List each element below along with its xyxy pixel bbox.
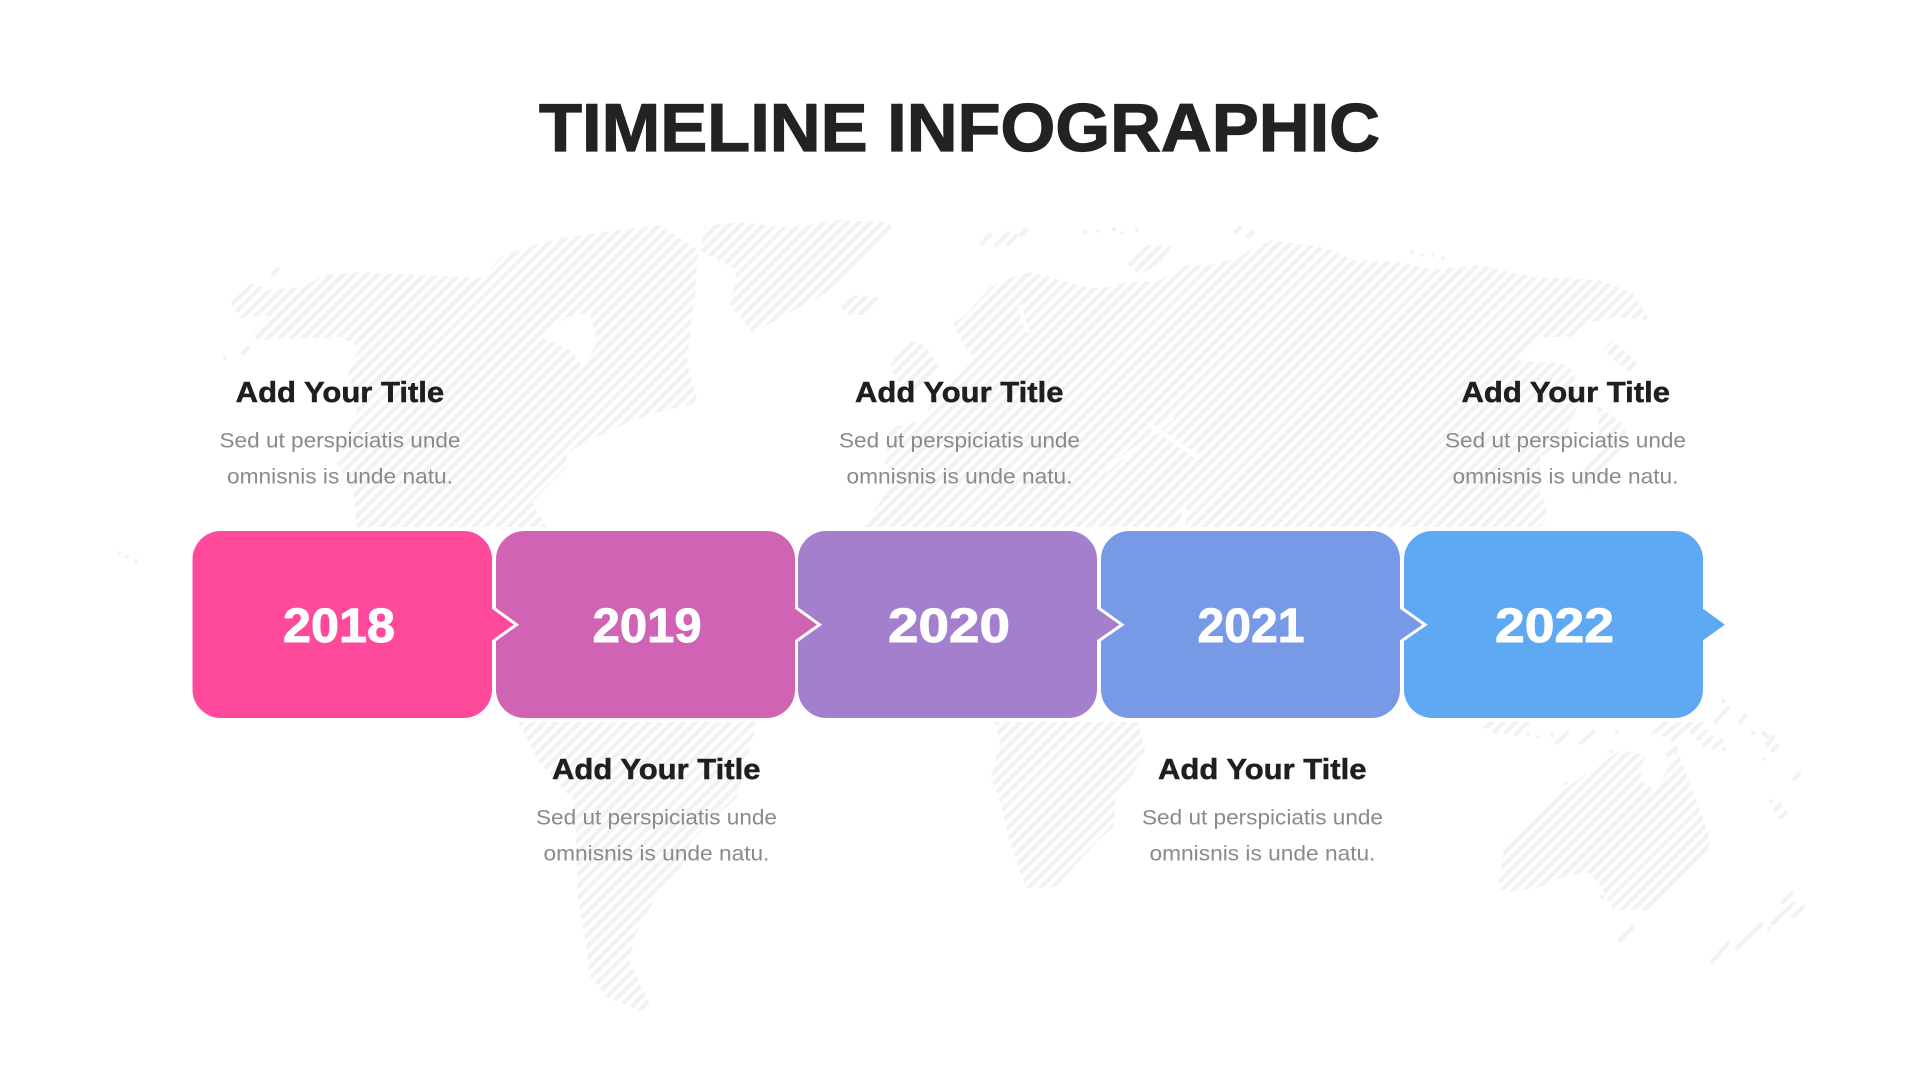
text block 2019: Add Your Title: [552, 754, 760, 786]
step 2018: [191, 530, 516, 720]
text block 2021: Sed ut perspiciatis unde: [1142, 806, 1383, 830]
step 2018: 2018: [283, 600, 395, 653]
text block 2018: omnisnis is unde natu.: [227, 464, 453, 488]
text block 2019: Sed ut perspiciatis unde: [536, 806, 777, 830]
text block 2022: Sed ut perspiciatis unde: [1445, 428, 1686, 452]
text block 2018: Sed ut perspiciatis unde: [220, 428, 460, 452]
text block 2021: omnisnis is unde natu.: [1150, 842, 1376, 866]
text block 2022: Add Your Title: [1462, 377, 1670, 409]
text block 2018: [220, 377, 460, 488]
gaps: [1020, 307, 1195, 527]
text block 2020: [839, 377, 1080, 488]
text block 2021: [1142, 754, 1383, 866]
timeline arrow boxes: [191, 530, 1728, 720]
step 2022: 2022: [1495, 600, 1614, 653]
step 2019: [494, 530, 820, 720]
text block 2019: omnisnis is unde natu.: [544, 842, 770, 866]
step 2019: 2019: [593, 600, 702, 653]
text block 2020: Sed ut perspiciatis unde: [839, 428, 1080, 452]
text block 2021: Add Your Title: [1158, 754, 1366, 786]
islands: [119, 228, 1803, 962]
title: TIMELINE INFOGRAPHIC: [539, 90, 1380, 166]
world map background: [119, 220, 1803, 1012]
text block 2022: omnisnis is unde natu.: [1452, 464, 1678, 488]
step 2022: [1402, 530, 1728, 720]
step 2021: 2021: [1198, 600, 1304, 653]
step 2020: 2020: [888, 600, 1010, 653]
text block 2020: omnisnis is unde natu.: [846, 464, 1072, 488]
text block 2019: [536, 754, 777, 866]
text block 2022: [1445, 377, 1686, 488]
step 2021: [1100, 530, 1425, 720]
text block 2020: Add Your Title: [855, 377, 1064, 409]
step 2020: [796, 530, 1122, 720]
text block 2018: Add Your Title: [236, 377, 444, 409]
